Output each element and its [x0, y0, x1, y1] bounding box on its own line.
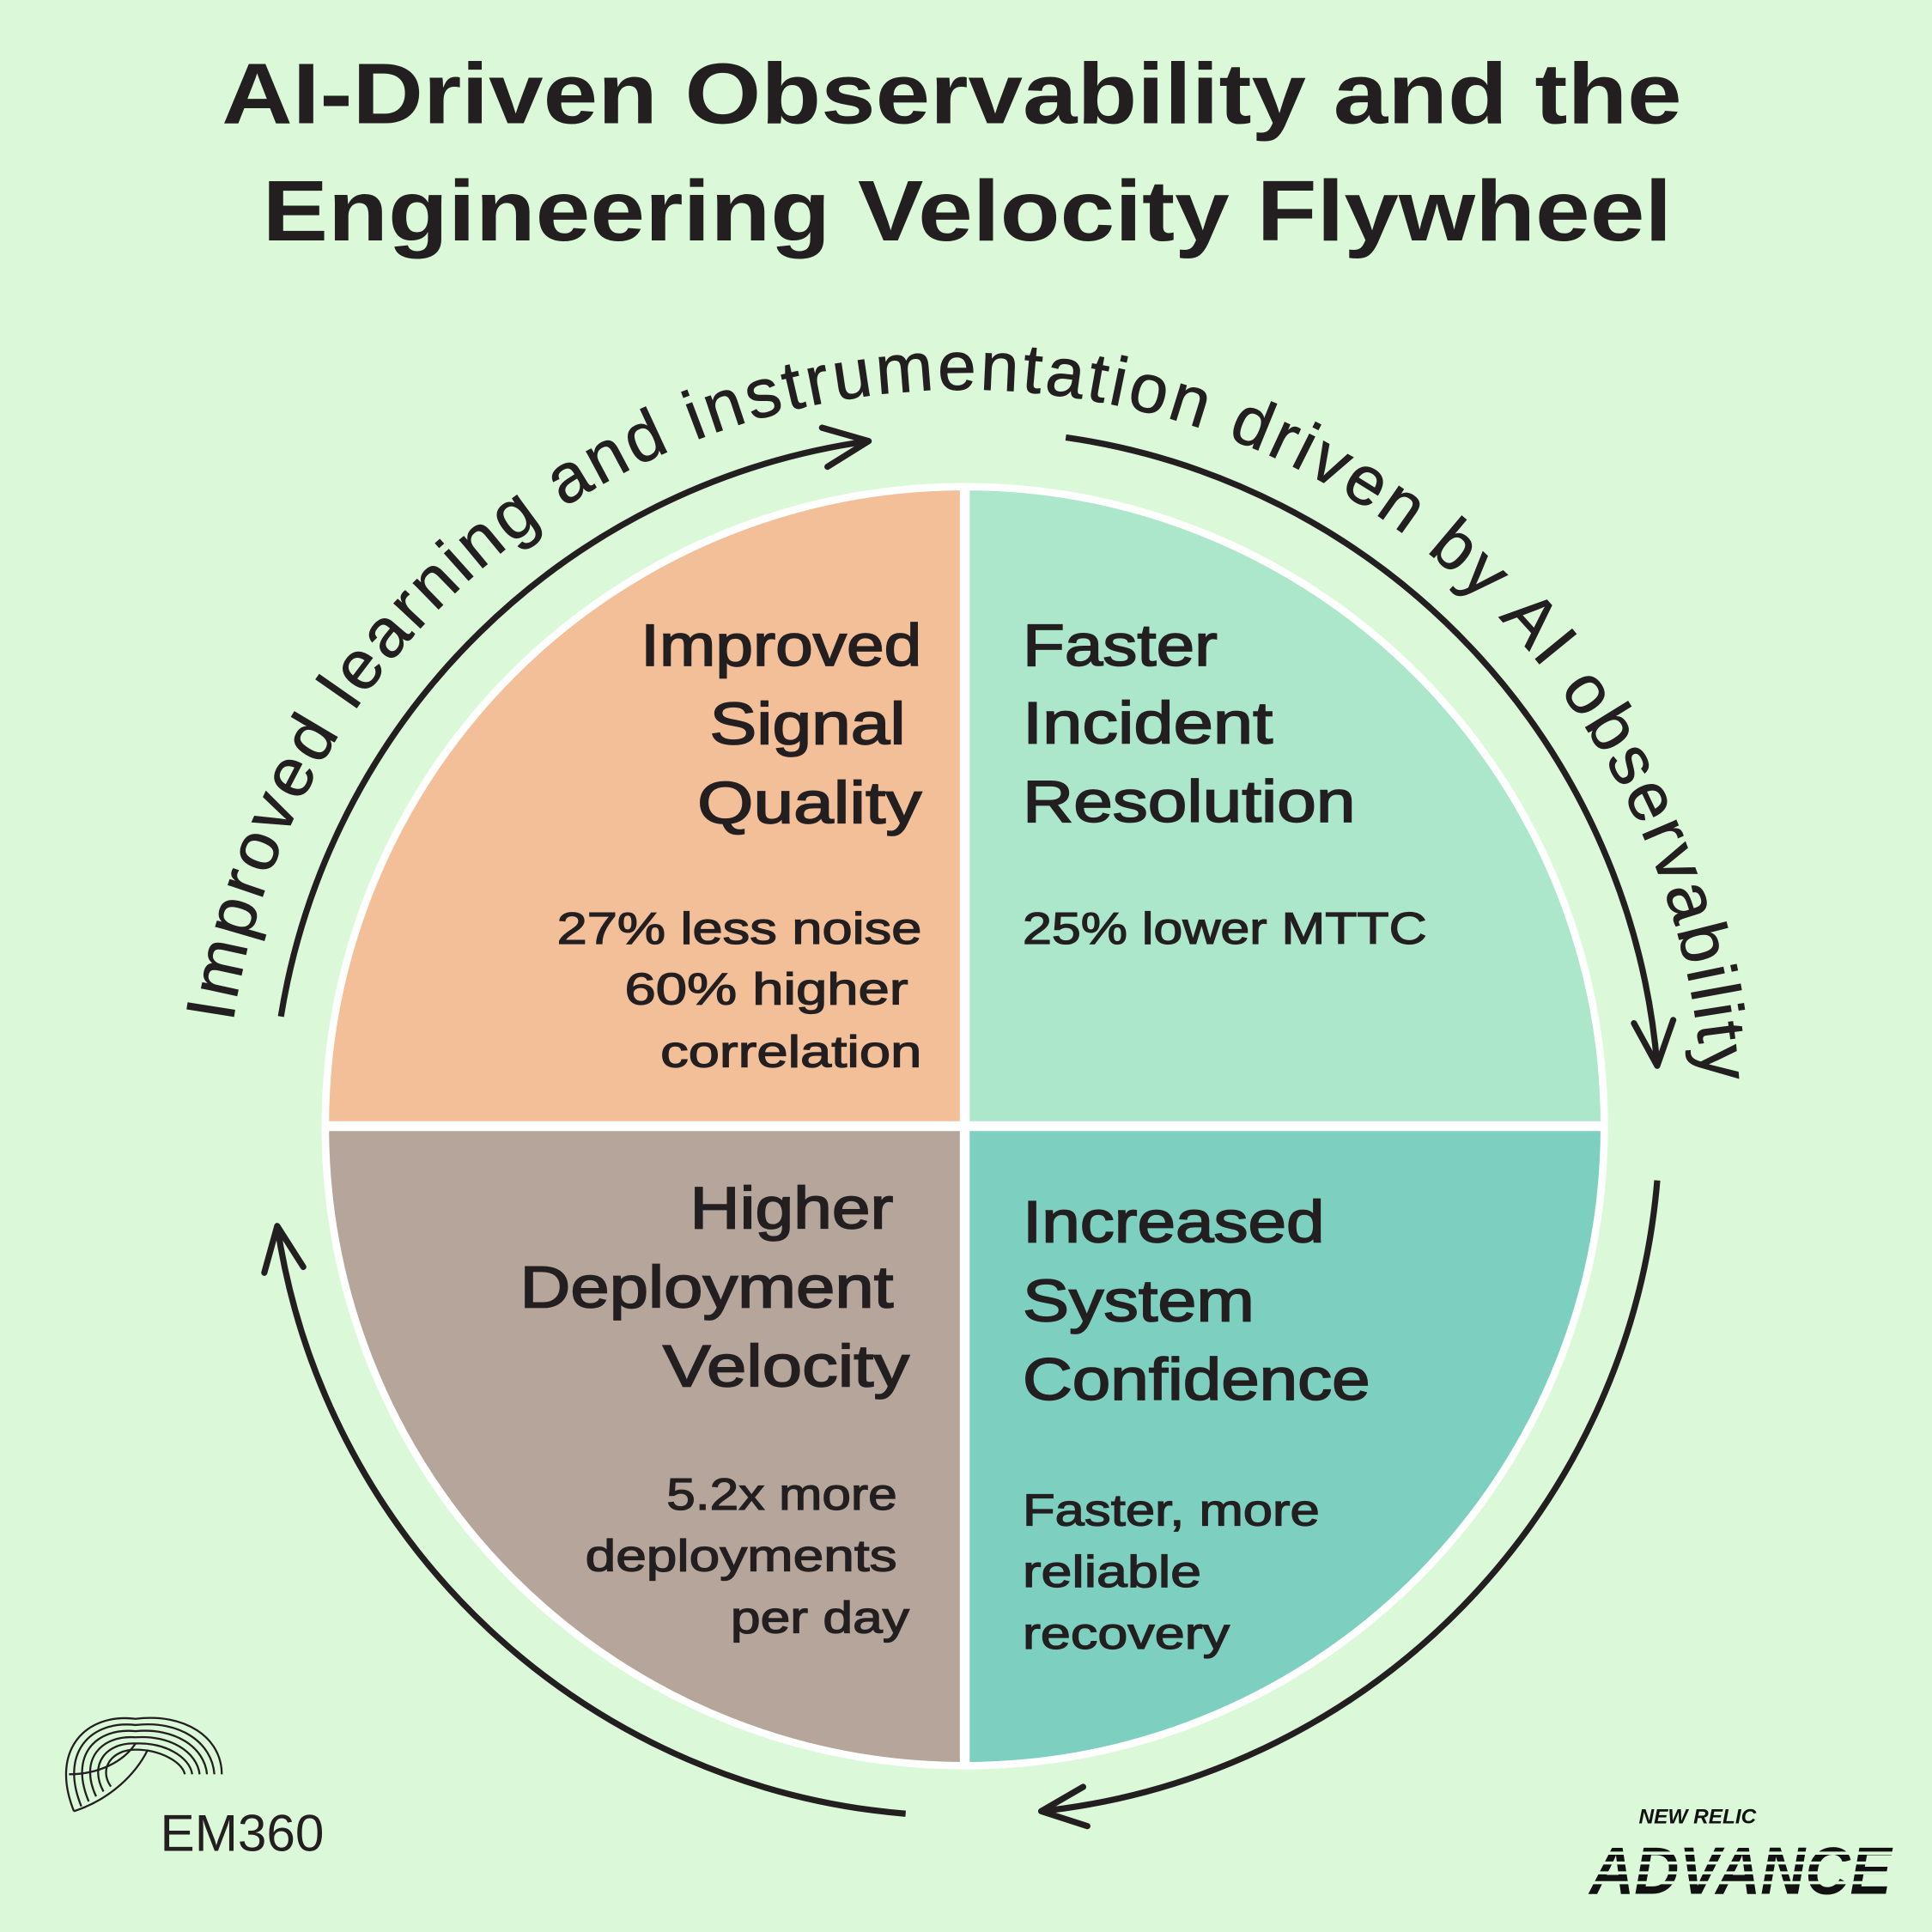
text: increased system confidence: recovery — [1023, 1608, 1230, 1658]
text: faster incident resolution: Resolution — [1023, 769, 1355, 835]
flywheel circle — [325, 487, 1604, 1765]
text: improved signal quality: Improved — [641, 612, 921, 678]
logo: New Relic Advance — [1583, 1806, 1898, 1909]
text: increased system confidence: Faster, more — [1023, 1485, 1320, 1534]
text: higher deployment velocity — [520, 1176, 910, 1642]
text: faster incident resolution: Incident — [1023, 690, 1273, 756]
text: faster incident resolution: Faster — [1023, 612, 1218, 678]
logo: New Relic Advance: NEW RELIC — [1638, 1806, 1757, 1829]
text: improved signal quality: correlation — [660, 1027, 921, 1077]
logo: EM360: EM360 — [161, 1803, 324, 1862]
title: Engineering Velocity Flywheel — [263, 163, 1672, 259]
title: AI-Driven Observability and the — [222, 46, 1682, 142]
logo: New Relic Advance: ADVANCE — [1588, 1835, 1893, 1909]
text: increased system confidence: System — [1023, 1267, 1255, 1334]
arrows: flywheel cycle — [277, 437, 1657, 1814]
curved label: Improved learning and instrumentation driven by AI observability — [186, 347, 1745, 1078]
text: higher deployment velocity: Higher — [690, 1176, 893, 1242]
quadrant: improved signal quality — [325, 487, 965, 1127]
text: improved signal quality: Signal — [710, 691, 906, 757]
text: increased system confidence: reliable — [1023, 1546, 1201, 1596]
text: increased system confidence: Confidence — [1023, 1346, 1370, 1413]
text: increased system confidence — [1023, 1188, 1370, 1658]
quadrant: increased system confidence — [965, 1127, 1604, 1765]
text: higher deployment velocity: 5.2x more — [666, 1469, 897, 1519]
text: increased system confidence: Increased — [1023, 1188, 1325, 1255]
text: faster incident resolution: 25% lower MTTC — [1023, 903, 1427, 953]
text: improved signal quality: 60% higher — [625, 963, 908, 1013]
quadrant: faster incident resolution — [965, 487, 1604, 1127]
logo: EM360 — [66, 1718, 324, 1862]
text: higher deployment velocity: deployments — [586, 1531, 897, 1581]
text: faster incident resolution — [1023, 612, 1427, 953]
text: improved signal quality: 27% less noise — [557, 903, 921, 953]
text: higher deployment velocity: Velocity — [663, 1333, 910, 1399]
text: improved signal quality: Quality — [697, 770, 922, 836]
text: improved signal quality — [557, 612, 922, 1077]
title — [222, 46, 1682, 259]
text: higher deployment velocity: per day — [731, 1592, 909, 1642]
text: higher deployment velocity: Deployment — [520, 1254, 893, 1320]
quadrant: higher deployment velocity — [325, 1127, 965, 1765]
